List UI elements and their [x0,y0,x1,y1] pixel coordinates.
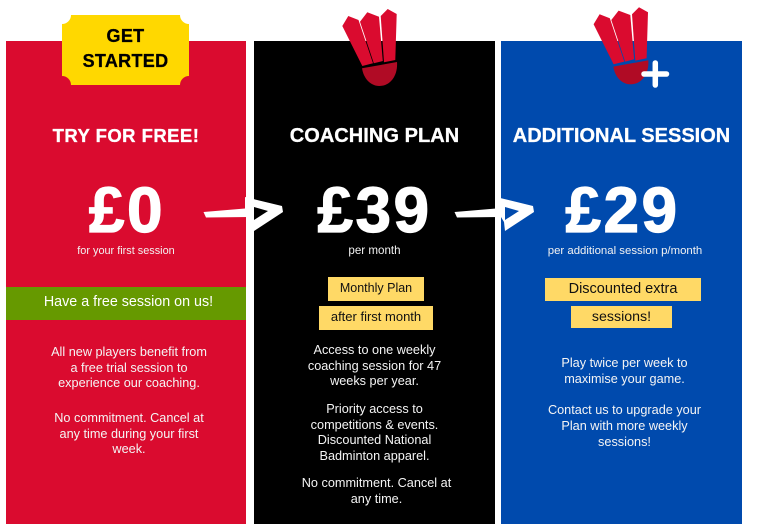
text: free plan benefit: experience our coaching. [58,376,200,390]
panel: coaching plan [254,41,495,524]
banner: free session [6,287,246,320]
text: coaching priority access: competitions & events. [311,418,438,432]
caption: per month: per month [348,244,401,257]
badge: get started: GET [107,26,144,46]
text: coaching priority access: Discounted National [318,433,431,447]
text: free plan commitment: week. [112,442,146,456]
price: additional: £29 [565,174,680,246]
panel: try for free [6,41,246,524]
badge: get started: STARTED [83,51,168,71]
caption: first session: for your first session [77,245,175,257]
caption: per additional session: per additional session p/month [548,245,702,257]
arrow: coaching to additional [454,198,534,231]
panel: additional session [501,41,742,524]
text: coaching priority access: Badminton apparel. [319,449,430,463]
text: additional details: Contact us to upgrade your [548,403,701,417]
text: coaching weekly session: weeks per year. [330,374,419,388]
text: additional details: Play twice per week to [561,356,688,370]
label: after first month: after first month [331,309,421,324]
label: discounted extra [545,278,701,301]
label: monthly plan [328,277,424,301]
text: additional details: maximise your game. [564,372,685,386]
label: discounted extra: Discounted extra [569,281,677,297]
arrow: free to coaching [204,197,283,231]
icon: shuttlecock coaching [342,9,398,86]
text: coaching no commitment [302,476,452,506]
price: free: £0 [89,174,165,246]
text: free plan benefit [51,345,207,390]
text: free plan benefit: All new players benefit from [51,345,207,359]
heading: coaching plan: COACHING PLAN [290,125,459,147]
text: free plan commitment [54,411,204,456]
text: additional details: sessions! [598,435,651,449]
icon: shuttlecock with plus [594,7,670,88]
heading: try for free: TRY FOR FREE! [53,125,199,146]
text: free plan commitment: No commitment. Cancel at [54,411,204,425]
label: sessions: sessions! [592,309,651,325]
text: additional details [548,356,701,449]
label: sessions [571,306,672,328]
banner: free session: Have a free session on us! [44,294,213,310]
price: coaching: £39 [317,174,432,246]
heading: additional session: ADDITIONAL SESSION [513,125,730,147]
text: coaching priority access [311,402,438,463]
text: free plan commitment: any time during your first [60,427,198,441]
label: after first month [319,306,433,330]
text: coaching weekly session [308,343,441,388]
text: coaching no commitment: No commitment. Cancel at [302,476,451,490]
text: free plan benefit: a free trial session to [70,361,188,375]
label: monthly plan: Monthly Plan [340,281,412,295]
text: additional details: Plan with more weekly [561,419,688,433]
text: coaching weekly session: Access to one weekly [314,343,436,357]
badge: get started [62,15,189,85]
text: coaching weekly session: coaching session for 47 [308,359,441,373]
text: coaching priority access: Priority access to [326,402,423,416]
text: coaching no commitment: any time. [351,492,402,506]
